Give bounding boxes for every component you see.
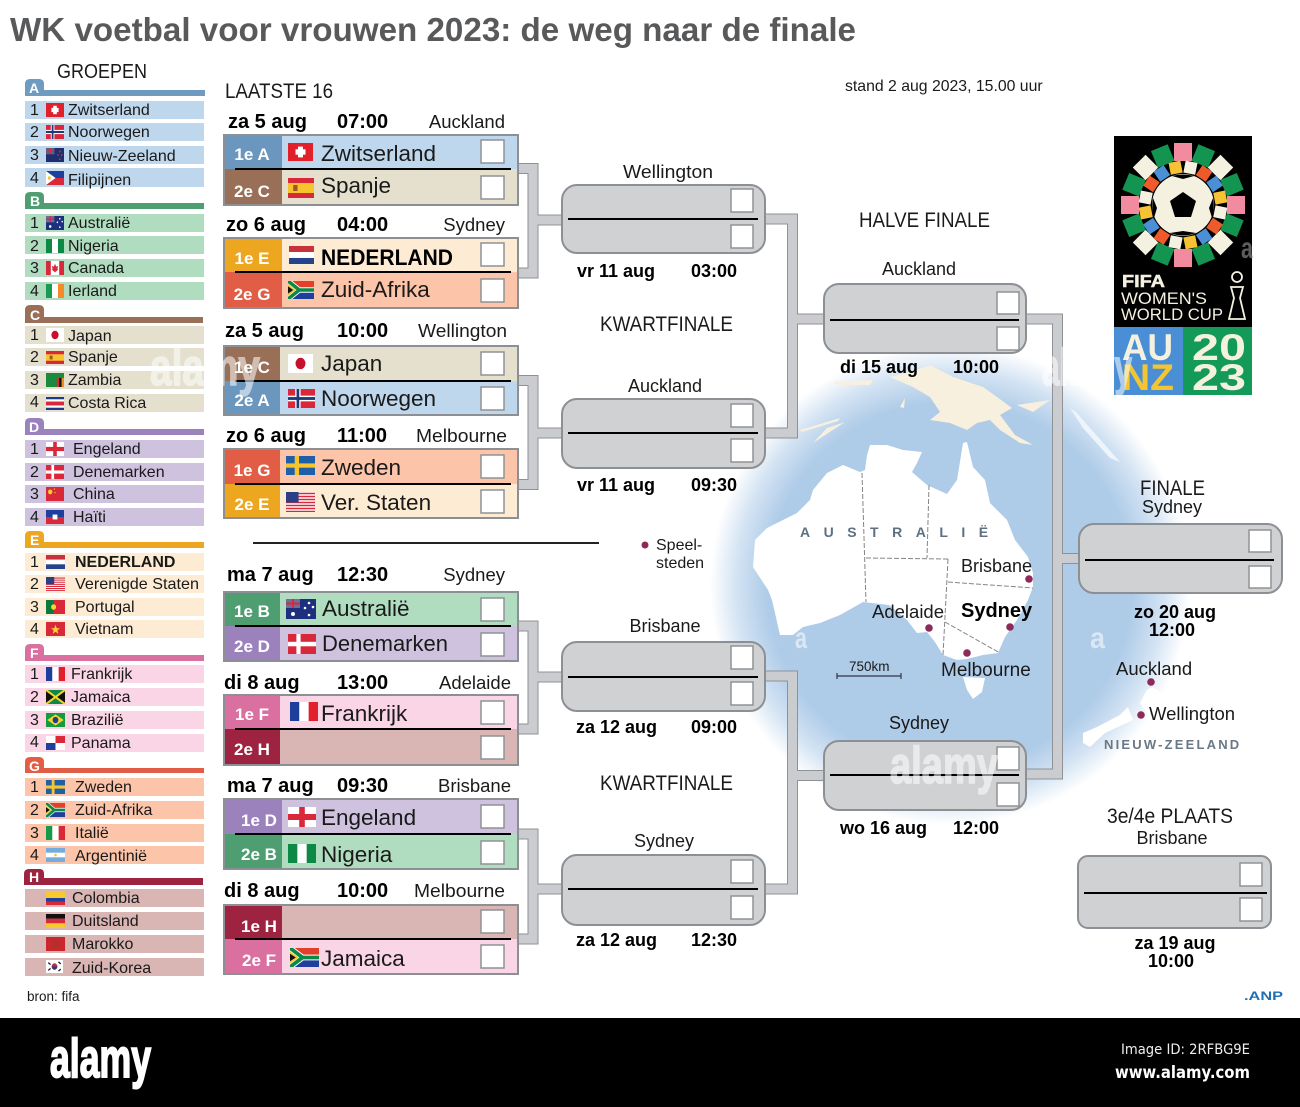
match: Nederland - Zuid-Afrika — [224, 238, 518, 308]
logo text: WORLD CUP — [1121, 305, 1223, 324]
third place match: Brisbane — [1136, 828, 1208, 848]
row: Costa Rica: Costa Rica — [68, 395, 146, 412]
panel: groep C — [25, 305, 204, 412]
row: Argentinië: 4 — [30, 847, 39, 864]
row: Ierland: Ierland — [68, 283, 117, 300]
map legend: speelsteden: steden — [656, 555, 704, 572]
match header: zo 6 aug Melbourne: 11:00 — [337, 425, 387, 447]
heading: groepen: GROEPEN — [57, 61, 147, 83]
final: Sydney — [1142, 497, 1202, 517]
semi-final: Auckland: Auckland — [882, 259, 956, 279]
row: Jamaica: Jamaica — [71, 689, 131, 706]
match: Frankrijk - 2e H: 2e H — [234, 740, 270, 759]
match: Engeland - Nigeria: 2e B — [241, 845, 277, 864]
row: Nigeria: 2 — [30, 238, 39, 255]
match: Engeland - Nigeria: Nigeria — [321, 842, 393, 867]
row: Spanje: Spanje — [68, 349, 118, 366]
row: Colombia: Colombia — [72, 890, 140, 907]
match header: di 8 aug Adelaide — [224, 672, 511, 694]
row: Italië: 3 — [30, 825, 39, 842]
watermark: alamy — [1042, 339, 1132, 397]
row: Nigeria: Nigeria — [68, 238, 119, 255]
row: Spanje: 2 — [30, 349, 39, 366]
panel: groep E: E — [30, 532, 39, 548]
match header: ma 7 aug Sydney: 12:30 — [337, 564, 388, 586]
semi-final: Sydney — [824, 713, 1026, 838]
semi-final: Sydney: wo 16 aug — [839, 818, 927, 838]
row: Spanje — [25, 348, 204, 366]
row: Denemarken — [25, 463, 204, 481]
match header: ma 7 aug Sydney: Sydney — [443, 564, 506, 585]
match: Zwitserland - Spanje: Spanje — [321, 173, 391, 198]
row: Portugal: Portugal — [75, 599, 135, 616]
logo text: WOMEN'S — [1121, 289, 1207, 308]
map labels and cities: AUSTRALIË — [800, 524, 1002, 540]
match header: di 8 aug Melbourne — [224, 880, 505, 902]
final: 12:00 — [1149, 620, 1195, 640]
match: Japan - Noorwegen — [224, 346, 518, 415]
row: Verenigde Staten — [25, 575, 204, 593]
panel: groep A: A — [29, 80, 39, 96]
match: 1e H - Jamaica: 1e H — [241, 917, 277, 936]
row: Zuid-Afrika — [25, 801, 204, 819]
semi-final: Sydney: Sydney — [889, 713, 949, 733]
match header: za 5 aug Auckland: 07:00 — [337, 111, 388, 133]
quarter-final: Sydney: 12:30 — [691, 930, 737, 950]
panel: groep G — [25, 757, 204, 865]
row: Denemarken: 2 — [30, 464, 39, 481]
map labels and cities: Sydney — [961, 600, 1033, 622]
row: Denemarken: Denemarken — [73, 464, 165, 481]
row: Zuid-Afrika: Zuid-Afrika — [75, 802, 152, 819]
match: Japan - Noorwegen: Japan — [321, 351, 382, 376]
row: Engeland: Engeland — [73, 441, 141, 458]
row: Argentinië: Argentinië — [75, 848, 147, 865]
match: Zweden - Ver. Staten: 1e G — [234, 461, 270, 480]
row: Jamaica: 2 — [30, 689, 39, 706]
match: Frankrijk - 2e H — [224, 695, 518, 765]
match header: za 5 aug Wellington: 10:00 — [337, 320, 388, 342]
image id: Image ID: 2RFBG9E — [1121, 1042, 1250, 1058]
row: Nederland — [25, 553, 204, 571]
row: Japan — [25, 326, 204, 345]
row: Canada — [25, 259, 204, 277]
map labels and cities: Auckland — [1116, 658, 1192, 679]
map labels and cities: Wellington — [1149, 703, 1235, 724]
match header: zo 6 aug Sydney: Sydney — [443, 214, 506, 235]
match: Engeland - Nigeria: Engeland — [321, 805, 416, 830]
final — [1079, 477, 1282, 640]
row: Haïti: 4 — [30, 509, 39, 526]
row: Jamaica — [25, 688, 204, 706]
row: Ierland: 4 — [30, 283, 39, 300]
row: China: 3 — [30, 486, 39, 503]
panel: groep H: H — [29, 869, 39, 885]
match: Japan - Noorwegen: Noorwegen — [321, 386, 436, 411]
row: Australië: Australië — [68, 215, 130, 232]
match header: ma 7 aug Brisbane: 09:30 — [337, 775, 388, 797]
row: Vietnam: Vietnam — [75, 621, 133, 638]
quarter-final: Wellington: Wellington — [623, 162, 713, 182]
map labels and cities: NIEUW-ZEELAND — [1104, 737, 1241, 752]
match header: za 5 aug Auckland: za 5 aug — [228, 111, 307, 133]
row: Costa Rica: 4 — [30, 394, 39, 411]
match header: ma 7 aug Brisbane — [227, 775, 511, 797]
row: Frankrijk: 1 — [30, 666, 39, 683]
quarter-final: Auckland — [562, 376, 765, 495]
watermark: alamy — [890, 737, 998, 795]
row: Zweden: 1 — [30, 779, 39, 796]
match header: di 8 aug Melbourne: di 8 aug — [224, 880, 300, 902]
row: Nieuw-Zeeland: Nieuw-Zeeland — [68, 148, 176, 165]
panel: groep G: G — [29, 758, 40, 774]
quarter-final: Wellington: 03:00 — [691, 261, 737, 281]
panel: groep A — [25, 79, 205, 189]
row: Panama — [25, 734, 204, 752]
match: Australië - Denemarken: 1e B — [234, 602, 270, 621]
match: Zweden - Ver. Staten: Ver. Staten — [321, 490, 431, 515]
bracket connectors — [519, 168, 1080, 939]
match header: za 5 aug Auckland: Auckland — [429, 111, 505, 132]
match: Engeland - Nigeria — [224, 799, 518, 869]
row: Duitsland: Duitsland — [72, 913, 139, 930]
panel: groep E — [25, 531, 204, 638]
row: Frankrijk — [25, 665, 204, 683]
match: Zwitserland - Spanje: Zwitserland — [321, 141, 436, 166]
row: Italië: Italië — [75, 825, 109, 842]
match header: zo 6 aug Sydney: 04:00 — [337, 214, 388, 236]
match: Australië - Denemarken — [224, 592, 518, 661]
logo: AU NZ 20 23: 23 — [1192, 357, 1246, 398]
row: Japan: 1 — [30, 327, 39, 344]
row: China: China — [73, 486, 115, 503]
row: Japan: Japan — [68, 328, 112, 345]
row: Engeland — [25, 440, 204, 458]
semi-final: Auckland: 10:00 — [953, 357, 999, 377]
final: zo 20 aug — [1134, 602, 1216, 622]
row: Marokko — [25, 935, 204, 953]
row: Argentinië — [25, 846, 204, 865]
match header: di 8 aug Melbourne: 10:00 — [337, 880, 388, 902]
quarter-final: Auckland: vr 11 aug — [577, 475, 655, 495]
semi-final: Auckland: di 15 aug — [840, 357, 918, 377]
match: Zwitserland - Spanje: 1e A — [234, 145, 270, 164]
semi-final: Auckland — [824, 259, 1026, 377]
match: Australië - Denemarken: Australië — [322, 596, 410, 621]
quarter-final: Brisbane: 09:00 — [691, 717, 737, 737]
row: Zwitserland: 1 — [30, 102, 39, 119]
match header: za 5 aug Wellington — [225, 320, 507, 342]
quarter-final: Sydney — [562, 831, 765, 950]
row: Engeland: 1 — [30, 441, 39, 458]
row: Zweden: Zweden — [75, 779, 132, 796]
row: Zambia — [25, 371, 204, 389]
quarter-final: Wellington: vr 11 aug — [577, 261, 655, 281]
match: 1e H - Jamaica: 2e F — [242, 951, 276, 970]
row: Marokko: Marokko — [72, 936, 133, 953]
third place match: za 19 aug — [1134, 933, 1216, 953]
match header: zo 6 aug Melbourne: zo 6 aug — [226, 425, 306, 447]
watermark: a — [1090, 622, 1105, 655]
map labels and cities — [800, 524, 1241, 752]
logo: AU NZ 20 23: AU — [1122, 327, 1173, 368]
quarter-final: Wellington — [562, 162, 765, 281]
logo text: FIFA — [1122, 271, 1165, 291]
row: Zwitserland — [25, 101, 204, 119]
row: China — [25, 485, 204, 503]
row: Ierland — [25, 282, 204, 300]
match: Zwitserland - Spanje — [224, 135, 518, 205]
row: Portugal — [25, 598, 204, 616]
logo: AU NZ 20 23: NZ — [1122, 357, 1174, 398]
panel: groep B — [25, 192, 204, 300]
match: Australië - Denemarken: Denemarken — [322, 631, 448, 656]
row: Canada: Canada — [68, 260, 124, 277]
heading: halve finale: HALVE FINALE — [859, 209, 990, 232]
row: Vietnam: 4 — [30, 621, 39, 638]
match: Japan - Noorwegen: 2e A — [234, 391, 270, 410]
logo: AU NZ 20 23: 20 — [1192, 327, 1246, 368]
match header: zo 6 aug Sydney: zo 6 aug — [226, 214, 306, 236]
row: Filipijnen — [25, 168, 204, 189]
divider line — [253, 542, 599, 544]
row: Haïti — [25, 508, 204, 526]
row: Brazilië: Brazilië — [71, 712, 124, 729]
match: Zweden - Ver. Staten: Zweden — [321, 455, 401, 480]
row: Portugal: 3 — [30, 599, 39, 616]
match header: di 8 aug Adelaide: Adelaide — [439, 672, 511, 693]
semi-final: Sydney: 12:00 — [953, 818, 999, 838]
row: Zambia: Zambia — [68, 372, 121, 389]
row: Brazilië: 3 — [30, 712, 39, 729]
map: Australia and New Zealand — [710, 345, 1190, 825]
row: Costa Rica — [25, 394, 204, 412]
quarter-final: Sydney: za 12 aug — [576, 930, 657, 950]
status date: stand 2 aug 2023, 15.00 uur — [845, 78, 1043, 95]
watermark: a — [1241, 232, 1253, 265]
match: Australië - Denemarken: 2e D — [234, 637, 270, 656]
row: Brazilië — [25, 711, 204, 729]
match header: ma 7 aug Brisbane: ma 7 aug — [227, 775, 314, 797]
logo wheel — [1121, 143, 1245, 267]
row: Zweden — [25, 778, 204, 796]
source: bron: fifa — [27, 989, 80, 1004]
row: Nigeria — [25, 236, 204, 255]
panel: groep F: F — [30, 645, 39, 661]
match: Zwitserland - Spanje: 2e C — [234, 182, 270, 201]
quarter-final: Brisbane: Brisbane — [629, 616, 701, 636]
row: Zuid-Korea: Zuid-Korea — [72, 960, 151, 977]
row: Italië — [25, 824, 204, 842]
match header: za 5 aug Auckland — [228, 111, 505, 133]
panel: groep D: D — [29, 419, 39, 435]
row: Verenigde Staten: Verenigde Staten — [75, 576, 199, 593]
watermark — [150, 232, 1253, 795]
match header: di 8 aug Adelaide: di 8 aug — [224, 672, 300, 694]
match header: zo 6 aug Melbourne: Melbourne — [416, 425, 507, 446]
third place match: 3e/4e PLAATS — [1107, 805, 1233, 828]
panel: groep B: B — [30, 193, 40, 209]
match header: zo 6 aug Melbourne — [226, 425, 507, 447]
logo: FIFA Women's World Cup 2023 — [1114, 136, 1252, 398]
match: Zweden - Ver. Staten: 2e E — [235, 495, 269, 514]
title: WK voetbal voor vrouwen 2023: de weg naar de finale — [10, 11, 856, 48]
row: Nederland: 1 — [30, 554, 39, 571]
row: Noorwegen: 2 — [30, 124, 39, 141]
match: Frankrijk - 2e H: Frankrijk — [321, 701, 408, 726]
row: Noorwegen: Noorwegen — [68, 124, 150, 141]
row: Noorwegen — [25, 123, 204, 141]
row: Duitsland — [25, 912, 204, 930]
match: Japan - Noorwegen: 1e C — [234, 358, 270, 377]
website: www.alamy.com — [1115, 1063, 1250, 1082]
match: Engeland - Nigeria: 1e D — [241, 811, 277, 830]
row: Nieuw-Zeeland: 3 — [30, 147, 39, 164]
panel: groep F — [25, 644, 204, 752]
row: Filipijnen: Filipijnen — [68, 172, 131, 189]
match: 1e H - Jamaica: Jamaica — [321, 946, 405, 971]
logo text — [1121, 271, 1245, 324]
quarter-final: Sydney: Sydney — [634, 831, 694, 851]
match header: di 8 aug Adelaide: 13:00 — [337, 672, 388, 694]
match header: za 5 aug Wellington: Wellington — [418, 320, 507, 341]
row: Zwitserland: Zwitserland — [68, 102, 150, 119]
third place match: 10:00 — [1148, 951, 1194, 971]
map legend: speelsteden — [642, 537, 704, 572]
match: 1e H - Jamaica — [224, 905, 518, 974]
watermark: alamy — [150, 339, 260, 397]
row: Panama: 4 — [30, 734, 39, 751]
heading: kwartfinale boven: KWARTFINALE — [600, 313, 733, 336]
match: Nederland - Zuid-Afrika: Zuid-Afrika — [321, 277, 430, 302]
quarter-final: Auckland: Auckland — [628, 376, 702, 396]
panel: groep C: C — [30, 307, 40, 323]
watermark: a — [795, 622, 807, 655]
match header: ma 7 aug Brisbane: Brisbane — [438, 775, 511, 796]
row: Vietnam — [25, 620, 204, 638]
row: Zambia: 3 — [30, 372, 39, 389]
row: Zuid-Korea — [25, 958, 204, 977]
row: Colombia — [25, 889, 204, 907]
match header: ma 7 aug Sydney — [227, 564, 506, 586]
heading: laatste 16: LAATSTE 16 — [225, 80, 333, 103]
row: Nederland: NEDERLAND — [75, 554, 175, 571]
row: Australië: 1 — [30, 215, 39, 232]
match header: ma 7 aug Sydney: ma 7 aug — [227, 564, 314, 586]
map labels and cities: Melbourne — [941, 660, 1031, 681]
row: Canada: 3 — [30, 260, 39, 277]
quarter-final: Brisbane: za 12 aug — [576, 717, 657, 737]
match: Nederland - Zuid-Afrika: NEDERLAND — [321, 245, 453, 270]
row: Frankrijk: Frankrijk — [71, 666, 133, 683]
map labels and cities: Brisbane — [961, 556, 1032, 576]
row: Filipijnen: 4 — [30, 170, 39, 187]
row: Zuid-Afrika: 2 — [30, 802, 39, 819]
footer band — [0, 1018, 1300, 1107]
map labels and cities: 750km — [849, 659, 890, 674]
quarter-final: Auckland: 09:30 — [691, 475, 737, 495]
match: Frankrijk - 2e H: 1e F — [235, 705, 269, 724]
row: Panama: Panama — [71, 735, 131, 752]
row: Haïti: Haïti — [73, 509, 106, 526]
row: Verenigde Staten: 2 — [30, 576, 39, 593]
row: Nieuw-Zeeland — [25, 146, 204, 165]
final: FINALE — [1140, 477, 1205, 500]
panel: groep D — [25, 418, 204, 526]
row: Australië — [25, 214, 204, 232]
logo: AU NZ 20 23 — [1122, 327, 1246, 398]
third place match — [1078, 805, 1271, 971]
quarter-final: Brisbane — [562, 616, 765, 737]
match header: za 5 aug Wellington: za 5 aug — [225, 320, 304, 342]
match header: zo 6 aug Sydney — [226, 214, 506, 236]
credit: ANP: .ANP — [1244, 989, 1283, 1003]
heading: kwartfinale onder: KWARTFINALE — [600, 772, 733, 795]
match: Zweden - Ver. Staten — [224, 449, 518, 518]
match: Nederland - Zuid-Afrika: 2e G — [234, 285, 270, 304]
panel: groep H — [24, 869, 204, 977]
map legend: speelsteden: Speel- — [656, 537, 702, 554]
match header: di 8 aug Melbourne: Melbourne — [414, 880, 505, 901]
map labels and cities: Adelaide — [872, 601, 944, 622]
match: Nederland - Zuid-Afrika: 1e E — [235, 249, 269, 268]
alamy logo: alamy — [50, 1027, 151, 1089]
